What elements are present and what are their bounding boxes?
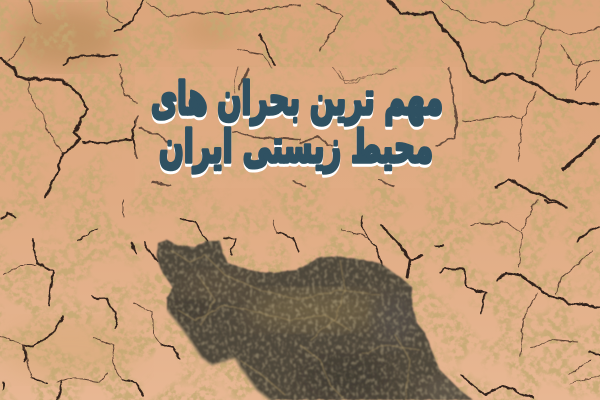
- title backing patch: [135, 67, 462, 188]
- title: white offset shadow: محیط زیستی ایران: [159, 123, 433, 176]
- title text: مهم ترین بحران های: [151, 72, 443, 125]
- title: white offset shadow: مهم ترین بحران های: [151, 75, 443, 128]
- title: white offset shadow: [151, 75, 443, 176]
- title text: [151, 72, 443, 173]
- map veins: [170, 250, 420, 400]
- map of Iran: dark earth silhouette: [150, 235, 480, 400]
- title text: محیط زیستی ایران: [159, 120, 433, 173]
